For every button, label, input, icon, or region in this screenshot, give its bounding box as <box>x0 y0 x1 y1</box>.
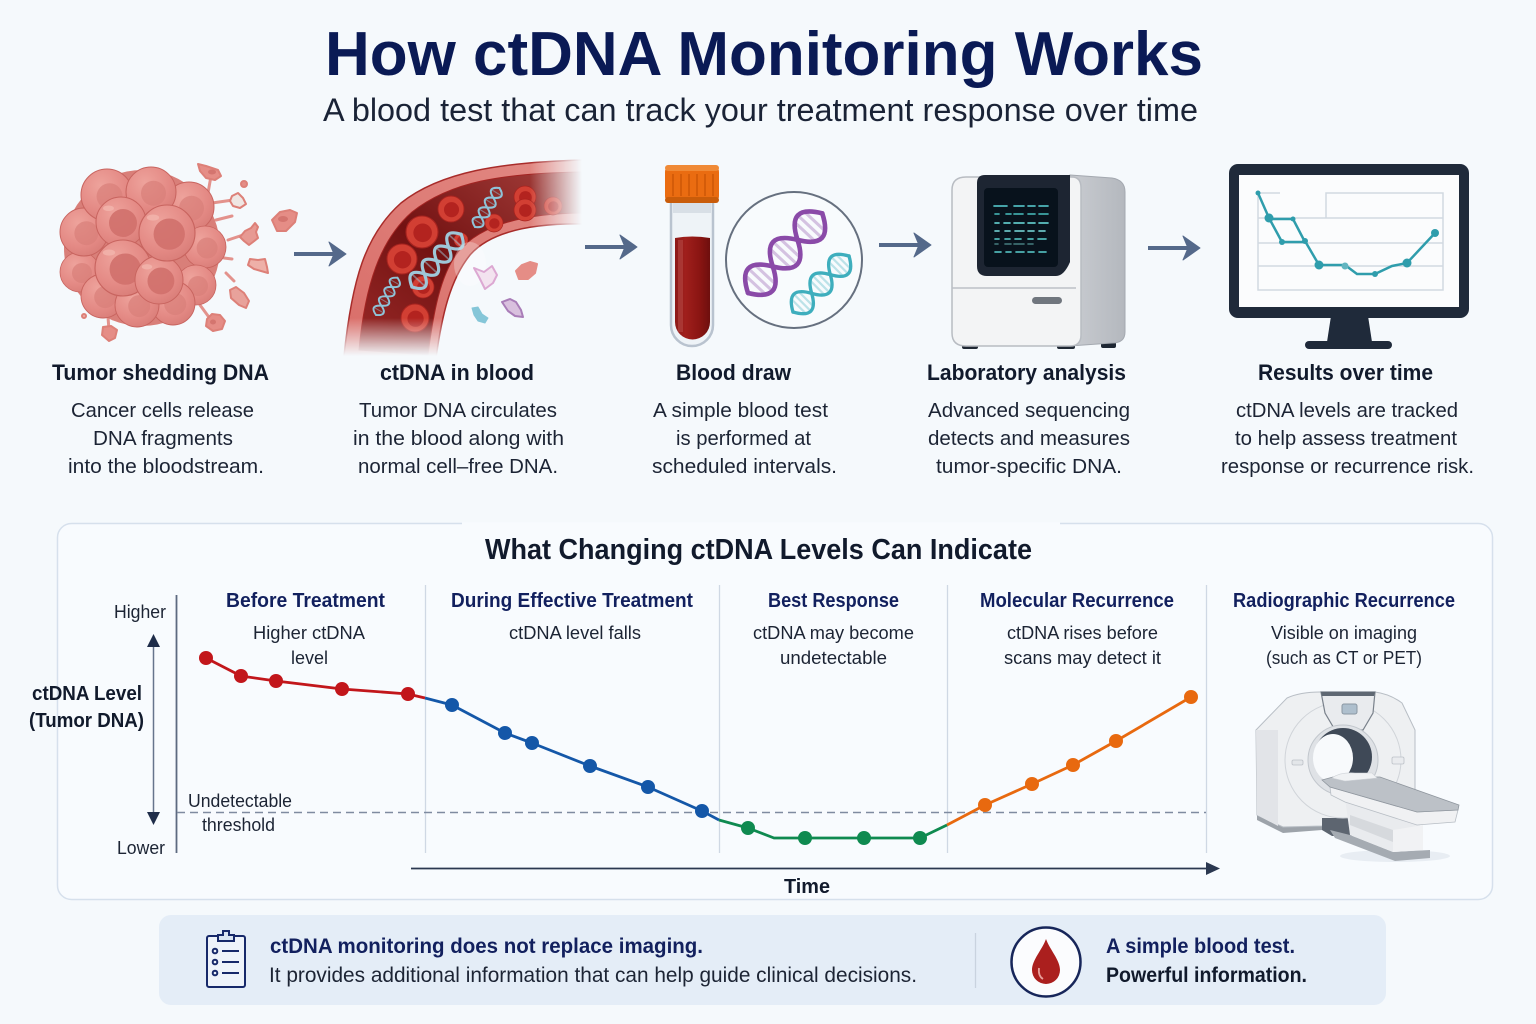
y axis: ctDNA Level <box>32 683 142 705</box>
description: to help assess treatment <box>1235 427 1457 450</box>
icon: DNA circle <box>726 192 862 328</box>
undetectable threshold: threshold <box>202 814 275 835</box>
arrow 3 <box>879 233 931 257</box>
description: detects and measures <box>928 427 1130 450</box>
description <box>652 399 837 478</box>
step 3: blood draw <box>652 165 862 478</box>
step 2: ctDNA in blood <box>344 160 585 478</box>
callout bar <box>159 915 1386 1005</box>
heading: Tumor shedding DNA <box>52 360 269 385</box>
icon: blood drop <box>1012 928 1080 996</box>
series: during effective treatment <box>425 698 719 820</box>
phase: best response: undetectable <box>780 647 887 668</box>
phase: molecular recurrence: scans may detect it <box>1004 647 1161 668</box>
description: DNA fragments <box>93 427 233 450</box>
phase: best response: ctDNA may become <box>753 622 914 643</box>
icon: clipboard <box>207 931 245 987</box>
description: Cancer cells release <box>71 399 254 422</box>
phase: before treatment: Before Treatment <box>226 590 385 612</box>
y axis: Higher <box>114 601 166 622</box>
phase: best response <box>753 590 914 668</box>
tagline: Powerful information. <box>1106 964 1307 987</box>
tagline <box>1106 935 1307 987</box>
arrow 1 <box>294 242 346 266</box>
description: response or recurrence risk. <box>1221 455 1474 478</box>
step 5: results over time <box>1221 164 1474 478</box>
phase: radiographic recurrence: Visible on imaging <box>1271 622 1417 643</box>
description: is performed at <box>676 427 811 450</box>
arrow 4 <box>1148 236 1200 260</box>
note text <box>269 935 917 987</box>
phase: during effective treatment: ctDNA level falls <box>509 622 641 643</box>
x axis: time <box>411 862 1220 898</box>
phase: radiographic recurrence: Radiographic Recurrence <box>1233 590 1455 612</box>
phase: radiographic recurrence: (such as CT or PET) <box>1266 647 1422 668</box>
heading: Laboratory analysis <box>927 360 1126 385</box>
x axis: time: Time <box>784 876 830 898</box>
phase: before treatment: Higher ctDNA <box>253 622 366 643</box>
icon: sequencer <box>952 175 1125 349</box>
description <box>68 399 264 478</box>
description: into the bloodstream. <box>68 455 264 478</box>
heading: Results over time <box>1258 360 1433 385</box>
description: Advanced sequencing <box>928 399 1130 422</box>
line chart: ctDNA level over time <box>199 651 1198 845</box>
description: in the blood along with <box>353 427 564 450</box>
description <box>1221 399 1474 478</box>
icon: blood vessel <box>344 160 585 358</box>
phase: molecular recurrence <box>980 590 1174 668</box>
undetectable threshold <box>177 790 1206 835</box>
note text: It provides additional information that can help guide clinical decisions. <box>269 964 917 987</box>
description: ctDNA levels are tracked <box>1236 399 1458 422</box>
phase: radiographic recurrence <box>1233 590 1455 668</box>
phase: molecular recurrence: Molecular Recurrence <box>980 590 1174 612</box>
note text: ctDNA monitoring does not replace imaging. <box>270 935 703 958</box>
y axis <box>29 595 176 858</box>
icon: CT scanner <box>1256 692 1459 862</box>
description <box>353 399 564 478</box>
panel heading: What Changing ctDNA Levels Can Indicate <box>485 534 1032 566</box>
series: molecular recurrence <box>947 690 1198 825</box>
phase: molecular recurrence: ctDNA rises before <box>1007 622 1158 643</box>
heading: Blood draw <box>676 360 792 385</box>
description: A simple blood test <box>653 399 828 422</box>
icon: monitor with chart <box>1229 164 1469 349</box>
phase: during effective treatment: During Effective Treatment <box>451 590 693 612</box>
arrow 2 <box>585 235 637 259</box>
y axis: Lower <box>117 837 165 858</box>
icon: tumor cluster <box>60 164 297 341</box>
title: How ctDNA Monitoring Works <box>325 20 1203 89</box>
series: best response <box>719 820 947 845</box>
icon: blood tube <box>665 165 719 346</box>
tagline: A simple blood test. <box>1106 935 1295 958</box>
heading: ctDNA in blood <box>380 360 534 385</box>
y axis: (Tumor DNA) <box>29 710 144 732</box>
panel: what changing ctDNA levels can indicate <box>29 524 1492 900</box>
step 1: tumor shedding DNA <box>52 164 297 478</box>
phase: during effective treatment <box>451 590 693 643</box>
phase: best response: Best Response <box>768 590 899 612</box>
description: tumor-specific DNA. <box>936 455 1122 478</box>
series: before treatment <box>199 651 425 701</box>
description: scheduled intervals. <box>652 455 837 478</box>
phase dividers <box>426 585 1206 853</box>
step 4: laboratory analysis <box>927 175 1130 478</box>
subtitle: A blood test that can track your treatment response over time <box>323 92 1198 128</box>
phase: before treatment: level <box>291 647 328 668</box>
description <box>928 399 1130 478</box>
undetectable threshold: Undetectable <box>188 790 292 811</box>
description: normal cell–free DNA. <box>358 455 558 478</box>
description: Tumor DNA circulates <box>359 399 557 422</box>
phase: before treatment <box>226 590 385 668</box>
